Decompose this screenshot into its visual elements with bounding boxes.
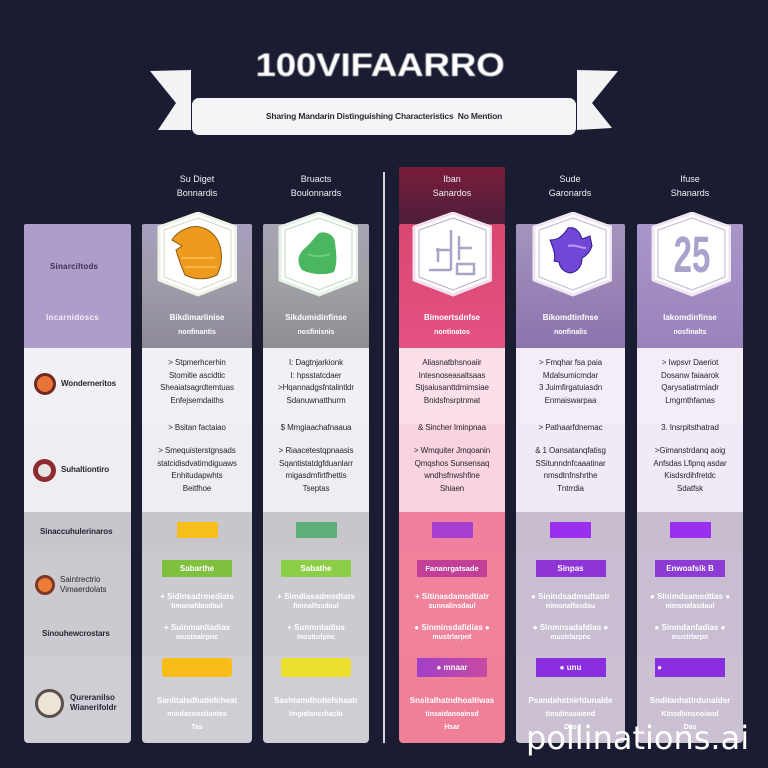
text block: row 7 <box>637 623 743 642</box>
header text: nosfinisnis <box>298 329 334 336</box>
title: 100VIFAARRO <box>255 47 505 83</box>
text block: row 8 <box>410 696 494 731</box>
text block: row 2 detail: statcidisdvatimdiguaws <box>157 459 237 468</box>
label: row 6 with icon: Vimaerdolats <box>60 585 107 594</box>
text block: row 1: 3 Juimfirgatuiasdn <box>539 383 602 392</box>
header text: Iakomdinfinse <box>663 313 717 322</box>
column heading 5 <box>671 174 709 198</box>
text block: row 1: >Hqannadgsfntalintldr <box>278 383 354 392</box>
text block: row 2 detail: migasdmfirtfhettis <box>286 471 346 480</box>
text block: row 1 <box>539 358 602 405</box>
label: row 8 with icon <box>35 689 117 718</box>
text block: row 2 detail: Tseptas <box>303 484 329 493</box>
icon: chart hexagon <box>412 212 492 297</box>
text block: row 8: Sanlitalsdhatiefcheat <box>157 696 237 705</box>
text block: row 1: Bnidsfnsrptnmat <box>424 396 480 405</box>
text block: row 6: nimsnafasdaul <box>665 603 714 610</box>
yellow bar <box>162 658 232 677</box>
text block: row 2 detail <box>535 446 606 493</box>
header text: nontinatos <box>434 329 470 336</box>
text block: row 1: Aliasnatbhsnoaiir <box>422 358 482 367</box>
text block: row 7 <box>287 623 345 641</box>
label: row 6 with icon <box>35 575 107 595</box>
text block: row 7 <box>164 623 230 641</box>
text block: row 6: fimnalfosdaul <box>293 603 339 610</box>
text block: row 2 detail: Sdatfsk <box>677 484 703 493</box>
text block: row 7 <box>533 623 608 641</box>
text block: row 2 detail <box>279 446 354 493</box>
header text: Bikomdtinfnse <box>543 313 598 322</box>
text block: row 8: Hsar <box>444 724 460 731</box>
text block: row 1 <box>637 357 743 408</box>
text block: row 8 <box>157 696 237 731</box>
panel: column 4 <box>516 224 625 743</box>
text block: row 1: Stomitie ascidtic <box>169 371 225 380</box>
label: row 8 with icon: Wianerifoldr <box>70 703 117 712</box>
text block: row 7: + Sunmntadius <box>287 623 345 632</box>
label: row 8 with icon: Qureranilso <box>70 693 115 702</box>
column heading 5: Shanards <box>671 188 709 198</box>
header text: Bikdimarlinise <box>170 313 224 322</box>
header text <box>637 311 743 340</box>
text block: row 6: ● Sinimdsamsdtlas ● <box>650 592 730 601</box>
text block: row 6: + Sitinasdamsdtiatr <box>415 592 489 601</box>
text block: row 2 detail: Anfsdas Lfipnq asdar <box>653 459 727 468</box>
text block: row 1: Dosanw faiaarok <box>661 371 719 380</box>
text block: row 2 detail: > Wmquiter Jmqoanin <box>414 446 490 455</box>
yellow bar <box>281 658 351 677</box>
text block: row 7: mustoalrpnc <box>176 634 218 641</box>
header text: Bimoertsdnfse <box>424 313 480 322</box>
label: row 7: Sinouhewcrostars <box>42 629 110 638</box>
text block: row 6: ● Sinindsadmsdtastr <box>531 592 610 601</box>
purple bar <box>417 658 487 677</box>
icon: round badge <box>35 689 64 718</box>
text block: row 1: Sheaiatsagrdtemtuas <box>160 383 234 392</box>
panel: column 3 featured <box>399 224 505 743</box>
text block: row 2 detail: nmsdtnfnshrthe <box>544 471 597 480</box>
text block: row 1: Sdanuwnatthurm <box>286 396 346 405</box>
text block: row 1: Enfejsemdaiths <box>170 396 224 405</box>
panel: column 1 <box>142 224 252 743</box>
text block: row 2 detail: SSitunndnfcaaatinar <box>535 459 606 468</box>
header text <box>543 313 598 336</box>
text block: row 1: Lmgmthfamas <box>665 396 715 405</box>
header text <box>285 313 347 336</box>
header text: nosfinalts <box>673 329 707 336</box>
text block: row 1 <box>160 358 234 405</box>
header text: nonfinalis <box>554 329 587 336</box>
text block: row 2 detail: Kisdsrdihfretdc <box>664 471 716 480</box>
text block: row 1 <box>278 358 354 405</box>
green bar: Sabathe <box>300 564 332 573</box>
text block: row 6 <box>637 592 743 611</box>
text block: row 2 detail: wndhsfnwshfine <box>424 471 480 480</box>
text block: row 8 <box>274 696 358 718</box>
text block: row 2 detail: > Smequisterstgnsads <box>158 446 236 455</box>
text block: row 7: ● Sinmdanfadias ● <box>654 623 726 632</box>
label: row 4 with icon <box>33 459 109 482</box>
text block: row 7: mostnrlpnc <box>297 634 335 641</box>
text block: row 2 detail: Qmqshos Sunsensaq <box>415 459 489 468</box>
text block: row 1 <box>415 358 489 405</box>
text block: row 8: tinsaidanoainsd <box>425 710 479 718</box>
text block: row 1: Intesnoseasaltsaas <box>419 371 485 380</box>
purple bar: Enwoafsik B <box>666 564 714 573</box>
text block: row 2 detail: > Riaacetestqpnaasis <box>279 446 353 455</box>
banner subtitle: Sharing Mandarin Distinguishing Characteristics No Mention <box>266 111 502 121</box>
column heading 3: Sanardos <box>433 188 471 198</box>
purple bar: ● unu <box>560 663 581 672</box>
header text: Sikdumidinfinse <box>285 313 347 322</box>
text block: row 1: I: Dagtnjarkionk <box>289 358 343 367</box>
text block: row 6 <box>160 592 234 610</box>
text block: row 2 detail: >Gimanstrdanq aoig <box>655 446 725 455</box>
green bar <box>162 560 232 577</box>
text block: row 2: > Pathaarfdnemac <box>538 423 602 432</box>
purple bar <box>536 658 606 677</box>
panel: column 5 <box>637 224 743 743</box>
purple bar <box>655 560 725 577</box>
text block: row 8: Tas <box>191 724 203 731</box>
column heading 2: Boulonnards <box>291 188 341 198</box>
label: row 2: Incarnidoscs <box>46 313 99 322</box>
text block: row 6: timonafdasdaul <box>171 603 223 610</box>
text block: row 2 detail: Shiaen <box>440 484 464 493</box>
swatch <box>296 522 336 538</box>
text block: row 8: Psandahstnirfdunalde <box>528 696 612 705</box>
column heading 4: Sude <box>559 174 581 184</box>
panel: row labels <box>24 224 131 743</box>
text block: row 6: + Simdiasadmsdtats <box>277 592 355 601</box>
text block: row 2 detail <box>414 446 490 493</box>
swatch <box>432 522 472 538</box>
column heading 3 <box>433 174 471 198</box>
swatch <box>670 522 710 538</box>
text block: row 7 <box>414 623 490 641</box>
text block: row 2 detail: Enhitudapwhts <box>171 471 223 480</box>
text block: row 2: & Sincher Iminpnaa <box>418 423 486 432</box>
ribbon banner <box>150 70 618 135</box>
text block: row 8 <box>637 695 743 734</box>
text block: row 2 detail: Tntrrdia <box>557 484 584 493</box>
text block: row 8: Snsitalhatndhoaltiwas <box>410 696 494 705</box>
raised tab: featured column <box>399 167 505 224</box>
text block: row 6 <box>415 592 489 610</box>
purple bar: ● mnaar <box>436 663 468 672</box>
text block: row 1: Enmaiswarpaa <box>545 396 596 405</box>
text block: row 6 <box>531 592 610 610</box>
text block: row 8: Ktnsdhinsnoiand <box>661 710 719 718</box>
column heading 1: Bonnardis <box>177 188 217 198</box>
text block: row 2 detail <box>637 445 743 496</box>
text block: row 1: > Fmqhar fsa paia <box>539 358 602 367</box>
column heading 1: Su Diget <box>180 174 214 184</box>
watermark: pollinations.ai <box>526 719 749 757</box>
text block: row 8: Das <box>564 724 577 731</box>
text block: row 7: + Suinmanitadias <box>164 623 230 632</box>
magenta bar <box>417 560 487 577</box>
text block: row 6 <box>277 592 355 610</box>
swatch <box>550 522 591 538</box>
text block: row 8: Imgidiancrhaclo <box>289 710 343 718</box>
vertical divider <box>383 172 385 743</box>
text block: row 8 <box>528 696 612 731</box>
text block: row 1: Qarysatiatrmiadr <box>661 383 719 392</box>
header text: nonfinantis <box>178 329 216 336</box>
text block: row 7: ● Sinmnsadafdias ● <box>533 623 608 632</box>
text block: row 8: Snditanhatirdunaldsr <box>650 696 730 705</box>
text block: row 2: $ Mmgiaachafnaaua <box>281 423 351 432</box>
column heading 4: Garonards <box>549 188 591 198</box>
text block: row 1: > Stpmerhcerhin <box>168 358 226 367</box>
column heading 2: Bruacts <box>301 174 331 184</box>
label: row 3 with icon: Wonderneritos <box>61 379 116 388</box>
text block: row 2: > Bsitan factaiao <box>168 423 226 432</box>
text block: row 6: nimonalfasdau <box>546 603 595 610</box>
text block: row 7: mustrlarpnc <box>550 634 591 641</box>
icon: orange hexagon <box>157 212 237 297</box>
column heading 1 <box>177 174 217 198</box>
purple bar: ● <box>657 663 662 672</box>
label: row 5: Sinaccuhulerinaros <box>40 527 112 536</box>
text block: row 8: Sashtamdhotiefshaatr <box>274 696 358 705</box>
text block: row 8: mindacnostiantes <box>167 710 227 718</box>
icon: round badge <box>34 373 56 395</box>
text block: row 7: ● Sinminsdafidias ● <box>414 623 490 632</box>
text block: row 7: mustrlarpnt <box>433 634 471 641</box>
label: row 1: Sinarciltods <box>50 262 98 271</box>
label: row 3 with icon <box>34 373 116 395</box>
green bar <box>281 560 351 577</box>
text block: row 2 detail: Beitfhoe <box>183 484 211 493</box>
label: row 6 with icon: Saintrectrio <box>60 575 100 584</box>
icon: number hexagon: 25 <box>674 227 710 284</box>
text block: row 1: Mdalsumicmdar <box>543 371 598 380</box>
panel: column 2 <box>263 224 369 743</box>
text block: row 8: tinsdinasoiend <box>546 710 595 718</box>
swatch <box>176 522 218 538</box>
column heading 3: Iban <box>443 174 461 184</box>
text block: row 8: Das <box>684 724 696 731</box>
icon: round badge <box>35 575 55 595</box>
text block: row 1: Stjsaiusanttdmimsiae <box>415 383 489 392</box>
icon: green hexagon <box>278 212 358 297</box>
label: row 4 with icon: Suhaltiontiro <box>61 465 109 474</box>
green bar: Sabarthe <box>180 564 214 573</box>
text block: row 2 detail <box>157 446 237 493</box>
purple bar <box>655 658 725 677</box>
purple bar: Sinpas <box>557 564 584 573</box>
header text <box>424 313 480 336</box>
column heading 2 <box>291 174 341 198</box>
text block: row 1: > Iwpsvr Daeriot <box>662 358 718 367</box>
text block: row 2: 3. Insrpitsthatrad <box>661 423 719 432</box>
text block: row 1: I: hpsstatcdaer <box>290 371 341 380</box>
icon: number hexagon <box>651 212 731 297</box>
column heading 4 <box>549 174 591 198</box>
header text <box>170 313 224 336</box>
icon: round badge <box>33 459 56 482</box>
text block: row 2 detail: Sqantistatdgfduanlarr <box>279 459 353 468</box>
icon: purple hexagon <box>532 212 612 297</box>
text block: row 6: + Sidinsadrmediats <box>160 592 234 601</box>
text block: row 7: mustrlarpn <box>672 634 708 641</box>
text block: row 6: sunnalinsdaul <box>428 603 476 610</box>
magenta bar: Fananrgatsade <box>425 564 479 573</box>
column heading 5: Ifuse <box>680 174 700 184</box>
purple bar <box>536 560 606 577</box>
text block: row 2 detail: & 1 Oansatanqfatisg <box>535 446 606 455</box>
